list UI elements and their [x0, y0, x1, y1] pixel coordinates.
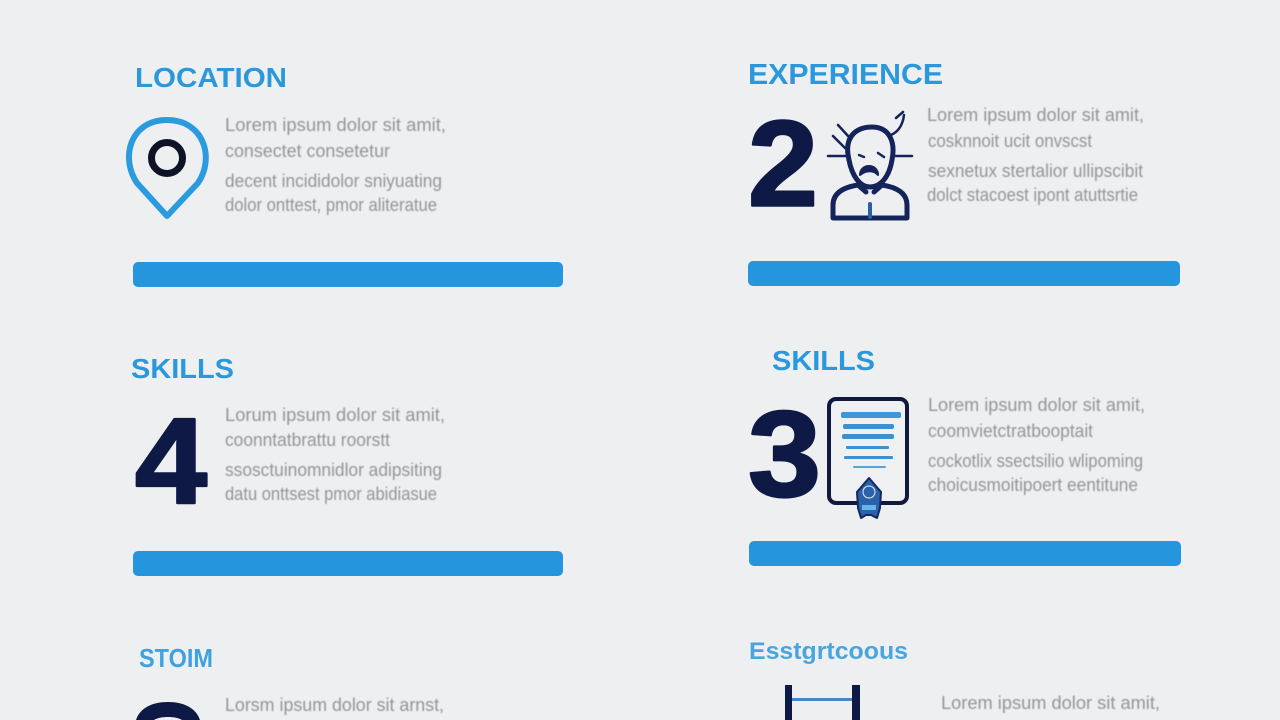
- text block: skills left: [225, 405, 445, 504]
- heading: skills right: SKILLS: [772, 345, 875, 376]
- text block: experience: [927, 105, 1144, 205]
- panel: skills right: [748, 345, 1181, 566]
- number: 2: 2: [748, 96, 818, 232]
- text block: location: Lorem ipsum dolor sit amit,: [225, 115, 446, 135]
- icon: stressed person: [828, 112, 912, 218]
- text block: experience: cosknnoit ucit onvscst: [928, 131, 1092, 151]
- text block: skills right: coomvietctratbooptait: [928, 421, 1093, 441]
- number: 4: 4: [135, 393, 207, 529]
- panel: bottom right: [749, 638, 1160, 720]
- text block: storm: Lorsm ipsum dolor sit arnst,: [225, 695, 444, 715]
- text block: skills right: [928, 395, 1145, 495]
- bar: skills right: [749, 541, 1181, 566]
- panel: experience: [748, 59, 1180, 286]
- text block: skills left: coonntatbrattu roorstt: [225, 430, 390, 450]
- number: partial: [136, 702, 200, 720]
- text block: location: consectet consetetur: [225, 141, 390, 161]
- text block: skills left: datu onttsest pmor abidiasue: [225, 484, 437, 504]
- heading: skills left: SKILLS: [131, 353, 234, 384]
- text block: bottom right: Lorem ipsum dolor sit amit,: [941, 693, 1160, 713]
- heading: bottom right: Esstgrtcoous: [749, 638, 908, 665]
- text block: location: decent incididolor sniyuating: [225, 171, 442, 191]
- panel: storm: [136, 643, 444, 720]
- text block: skills left: ssosctuinomnidlor adipsiting: [225, 460, 442, 480]
- text block: location: [225, 115, 446, 215]
- text block: skills right: cockotlix ssectsilio wlipoming: [928, 451, 1143, 471]
- bar: location: [133, 262, 563, 287]
- bar: skills left: [133, 551, 563, 576]
- text block: experience: dolct stacoest ipont atuttsrtie: [927, 185, 1138, 205]
- icon: certificate: [829, 399, 907, 518]
- number: 3: 3: [748, 386, 821, 522]
- heading: storm: STOIM: [139, 643, 213, 673]
- text block: experience: Lorem ipsum dolor sit amit,: [927, 105, 1144, 125]
- text block: location: dolor onttest, pmor aliteratue: [225, 195, 437, 215]
- panel: location: [129, 62, 563, 287]
- text block: skills right: choicusmoitipoert eentitune: [928, 475, 1138, 495]
- icon: map pin: [129, 120, 206, 216]
- icon: ladder: [785, 685, 860, 720]
- bar: experience: [748, 261, 1180, 286]
- text block: experience: sexnetux stertalior ullipscibit: [928, 161, 1143, 181]
- panel: skills left: [131, 353, 563, 576]
- heading: experience: EXPERIENCE: [748, 59, 943, 91]
- heading: location: LOCATION: [135, 62, 287, 93]
- text block: skills right: Lorem ipsum dolor sit amit,: [928, 395, 1145, 415]
- text block: skills left: Lorum ipsum dolor sit amit,: [225, 405, 445, 425]
